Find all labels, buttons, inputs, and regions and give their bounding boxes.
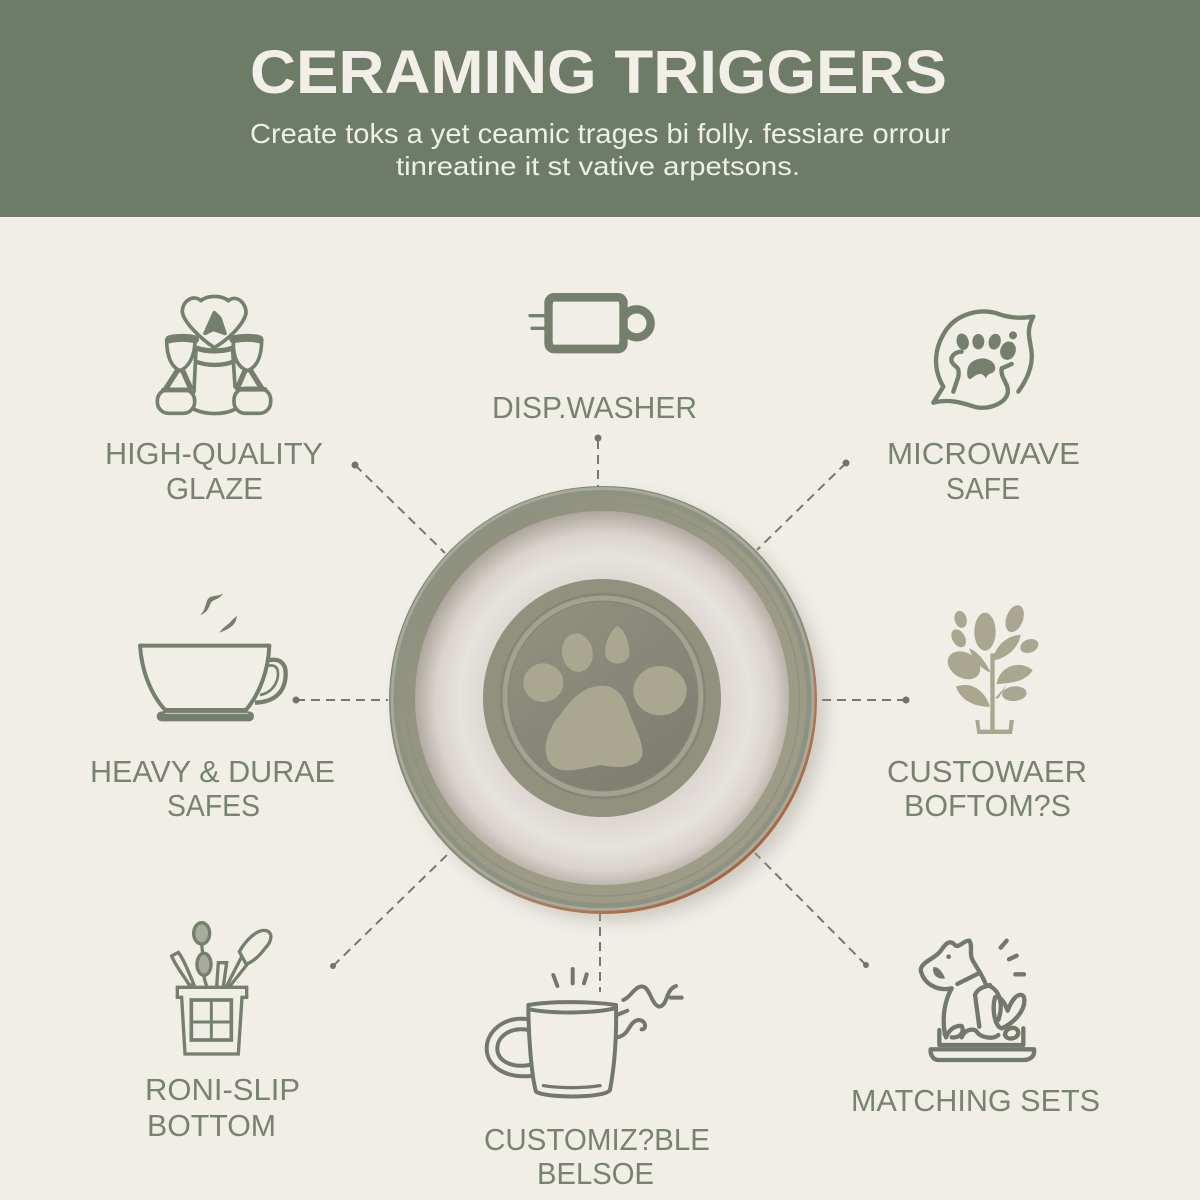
item: matching sets [851, 941, 1100, 1118]
label: HIGH-QUALITY [105, 436, 323, 471]
item: custom bottoms [887, 603, 1087, 823]
label [90, 754, 335, 823]
label: CUSTOWAER [887, 754, 1087, 789]
label [887, 436, 1080, 506]
label: MATCHING SETS [851, 1083, 1100, 1118]
connector lines [292, 434, 910, 992]
label [145, 1072, 300, 1143]
item: customizable [484, 969, 710, 1191]
icon: mug with steam [487, 969, 682, 1096]
bowl dish [415, 511, 789, 885]
label: HEAVY & DURAE [90, 754, 335, 789]
item: non-slip bottom [145, 923, 300, 1143]
paw print [523, 626, 687, 770]
item: microwave safe [887, 312, 1080, 506]
label: GLAZE [166, 471, 263, 506]
item: dishwasher [492, 297, 697, 425]
icon: pot with tools [172, 923, 271, 1054]
label: BELSOE [537, 1156, 654, 1191]
label: DISP.WASHER [492, 390, 697, 425]
label: BOTTOM [147, 1108, 276, 1143]
icon: plant in tray [943, 603, 1040, 734]
label: MICROWAVE [887, 436, 1080, 471]
item: high-quality glaze [105, 296, 323, 506]
subtitle [250, 118, 950, 181]
label: RONI-SLIP [145, 1072, 300, 1107]
inner well [483, 579, 721, 817]
bowl rim [389, 486, 817, 914]
label: CUSTOMIZ?BLE [484, 1122, 710, 1157]
icon: teacup with steam [140, 593, 286, 721]
label [484, 1122, 710, 1191]
icon: paw in speech leaf [933, 312, 1033, 408]
label: SAFES [167, 788, 260, 823]
header band [0, 0, 1200, 217]
label [105, 436, 323, 506]
label [887, 754, 1087, 823]
label: BOFTOM?S [904, 788, 1071, 823]
icon: dog figurine [921, 941, 1034, 1060]
icon: mug with motion lines [530, 297, 651, 349]
item: heavy and durable [90, 593, 335, 823]
subtitle: tinreatine it st vative arpetsons. [396, 151, 800, 181]
icon: goblets and heart [157, 296, 271, 414]
central ceramic bowl [389, 486, 825, 921]
title: CERAMING TRIGGERS [250, 38, 947, 106]
label: SAFE [946, 471, 1020, 506]
subtitle: Create toks a yet ceamic trages bi folly. fessiare orrour [250, 118, 950, 149]
